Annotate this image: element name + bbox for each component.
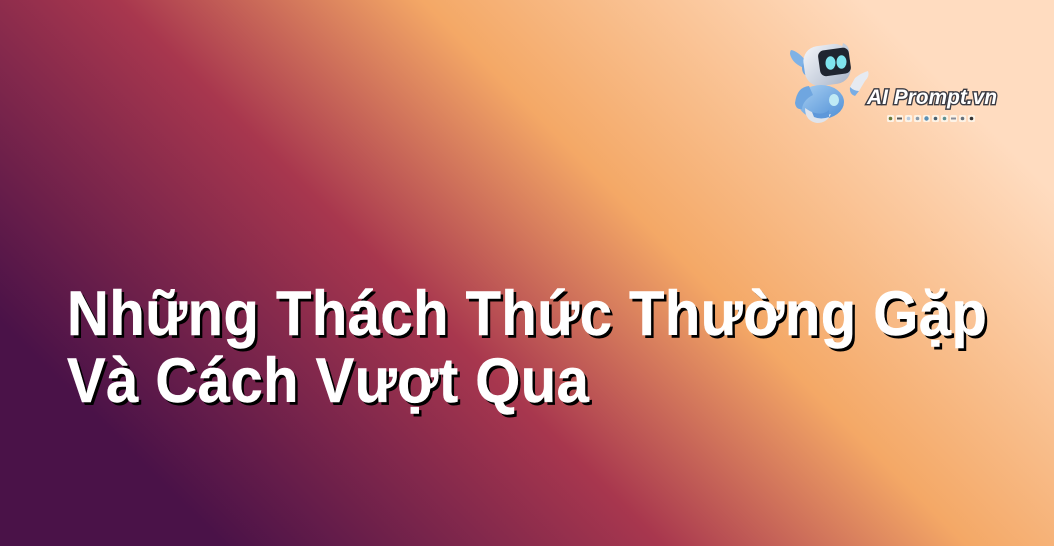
title: Những Thách Thức Thường Gặp (67, 279, 987, 349)
logo: AI Prompt.vn (790, 43, 998, 123)
title (67, 279, 988, 418)
icon: robot mascot (790, 42, 869, 123)
logo wordmark: AI Prompt.vn (866, 86, 997, 109)
title: Và Cách Vượt Qua (67, 346, 589, 416)
logo icon row (887, 115, 975, 122)
